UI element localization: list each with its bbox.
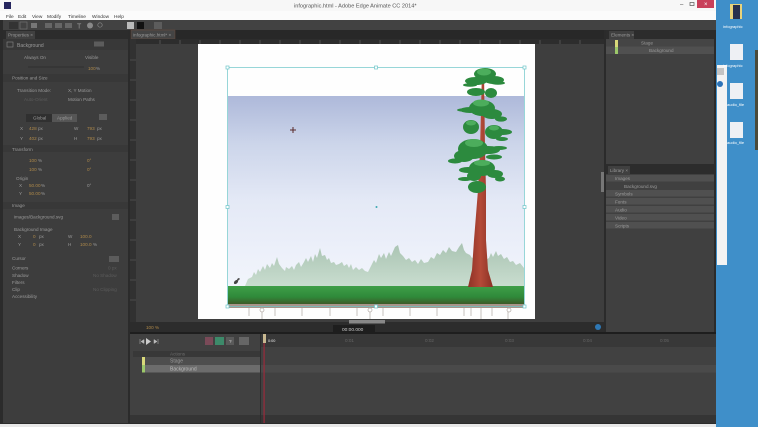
panel: timeline: 0:00 [268, 339, 275, 343]
title bar: – [680, 2, 684, 8]
panel: timeline [130, 332, 716, 423]
panel: properties: px [39, 234, 45, 239]
panel: properties: Corners [12, 266, 29, 270]
panel: properties: % [41, 191, 45, 196]
panel: properties: Applied [57, 116, 73, 120]
desktop icons: audio_file [727, 140, 745, 145]
panel: elements: Stage [641, 40, 653, 46]
menu bar: Window [92, 14, 110, 20]
layer: background: Background [170, 366, 197, 372]
layer: background [142, 365, 261, 372]
menu bar: Edit [18, 14, 27, 20]
panel: canvas: 00:00.000 [342, 327, 364, 333]
stage [198, 44, 535, 319]
panel: properties: Y [20, 136, 23, 141]
timeline controls [140, 337, 249, 345]
panel: properties: 793 [87, 136, 95, 141]
panel: properties: Transition Mode: [17, 88, 51, 93]
panel: library: Symbols [615, 192, 633, 196]
playhead [263, 334, 266, 423]
ground grass [228, 286, 524, 304]
title bar: × [704, 2, 708, 8]
panel: library [606, 164, 714, 333]
panel: properties: % [93, 242, 97, 247]
toolbar: T [77, 24, 82, 30]
panel: properties: Accessibility [12, 294, 38, 299]
ruler ticks [249, 308, 511, 319]
panel: timeline: 0:01 [345, 338, 354, 343]
desktop icons: audio_file [727, 102, 745, 107]
panel: properties: 0 [33, 242, 36, 247]
panel: properties: 402 [29, 136, 37, 141]
layer header: Actions [170, 352, 186, 356]
desktop area [716, 0, 758, 427]
panel: elements: Background [649, 48, 674, 53]
panel: properties: H [68, 242, 71, 247]
panel: library: Images [615, 176, 631, 181]
panel: properties: Global [33, 116, 46, 120]
panel: elements [606, 30, 714, 164]
panel: properties: px [38, 126, 44, 131]
panel: properties: Y [18, 242, 21, 247]
panel: properties: Background Image [14, 227, 53, 232]
panel: properties: X, Y Motion [68, 88, 92, 93]
panel: canvas: infographic.html* × [133, 32, 171, 38]
panel: properties: X [20, 126, 23, 131]
panel: properties: Shadow [12, 273, 29, 278]
panel: properties: Auto-Orient [24, 97, 48, 102]
menu bar: View [32, 14, 43, 20]
panel: properties: Properties × [8, 32, 33, 38]
panel: properties: px [97, 136, 103, 141]
panel: timeline: 0:04 [583, 338, 592, 343]
title bar: infographic.html - Adobe Edge Animate CC 2014* [294, 4, 417, 10]
panel: properties: px [38, 136, 44, 141]
layer header [133, 351, 261, 357]
menu bar: Help [114, 14, 124, 20]
foliage [448, 68, 512, 193]
menu bar [0, 11, 716, 20]
panel: properties: Clip [12, 287, 20, 292]
panel: timeline: 0:03 [505, 338, 514, 343]
panel: timeline: 0:02 [425, 338, 434, 343]
panel: properties: Motion Paths [68, 97, 96, 102]
panel: properties: 50.00 [29, 191, 41, 196]
panel: properties: X [18, 234, 21, 239]
panel: properties: Image [12, 203, 25, 208]
panel: properties: Transform [12, 147, 33, 152]
cursor [290, 127, 296, 133]
layer: stage [142, 357, 261, 365]
panel: properties: H [74, 136, 77, 141]
panel: properties: W [74, 126, 79, 131]
panel: properties: 793 [87, 126, 95, 131]
panel: library: Scripts [615, 224, 630, 228]
panel: properties: 428 [29, 126, 37, 131]
panel: properties: 0° [87, 183, 92, 188]
panel: properties: Origin [16, 176, 29, 181]
panel: properties: Filters [12, 280, 25, 285]
panel: properties: px [39, 242, 45, 247]
desktop icons [723, 4, 745, 145]
panel: properties: Position and Size [12, 76, 48, 80]
distant forest hills [245, 243, 524, 286]
timeline controls: ? [229, 339, 232, 344]
panel: properties: 100.0 [80, 242, 92, 247]
panel: library: Video [615, 216, 627, 220]
panel: properties: 0° [87, 158, 92, 163]
panel: canvas: 100 % [146, 325, 159, 330]
panel: library: Fonts [615, 200, 627, 204]
tree [448, 68, 512, 287]
panel: properties: 100 [29, 167, 37, 172]
panel: library: Background.svg [624, 184, 657, 189]
panel: elements: Elements × [611, 32, 634, 38]
panel: library: Library × [610, 168, 628, 173]
panel: properties: 0 [33, 234, 36, 239]
icon: small bird [233, 278, 240, 285]
selection frame [226, 66, 526, 308]
menu bar: Modify [47, 14, 62, 20]
panel: properties: X [19, 183, 22, 188]
panel: properties: px [97, 126, 103, 131]
panel: properties [3, 30, 128, 423]
panel: properties: No Clipping [93, 287, 117, 292]
menu bar: Timeline [68, 14, 86, 20]
soil [228, 304, 524, 308]
panel: properties: Visible [85, 55, 99, 60]
panel: properties: % [96, 66, 100, 71]
panel: properties: 100 [88, 66, 96, 71]
desktop icons: infographic [723, 63, 743, 68]
panel: properties: 100.0 [80, 234, 92, 239]
bottom window edge [0, 424, 716, 427]
panel: properties: 0 px [108, 266, 117, 270]
panel: properties: images/Background.svg [14, 214, 63, 220]
panel: properties: 50.00 [29, 183, 41, 188]
panel: timeline: 0:05 [660, 338, 669, 343]
trunk [468, 70, 493, 287]
panel: properties: % [38, 158, 42, 163]
panel: properties: Background [17, 43, 44, 49]
title bar [0, 0, 716, 11]
panel: properties: Cursor [12, 256, 26, 261]
menu bar: File [6, 14, 14, 20]
panel: properties: W [68, 234, 73, 239]
panel: properties: % [41, 183, 45, 188]
panel: properties: 100 [29, 158, 37, 163]
panel: properties: 0° [87, 167, 92, 172]
panel: properties: Y [19, 191, 22, 196]
desktop icons: infographic [723, 24, 743, 29]
panel: properties: % [38, 167, 42, 172]
panel: properties: No Shadow [93, 273, 117, 278]
panel: properties: Always On [24, 55, 46, 60]
layer: stage: Stage [170, 358, 183, 364]
panel: canvas [130, 30, 604, 333]
panel: library: Audio [615, 208, 627, 212]
toolbar [3, 20, 716, 30]
